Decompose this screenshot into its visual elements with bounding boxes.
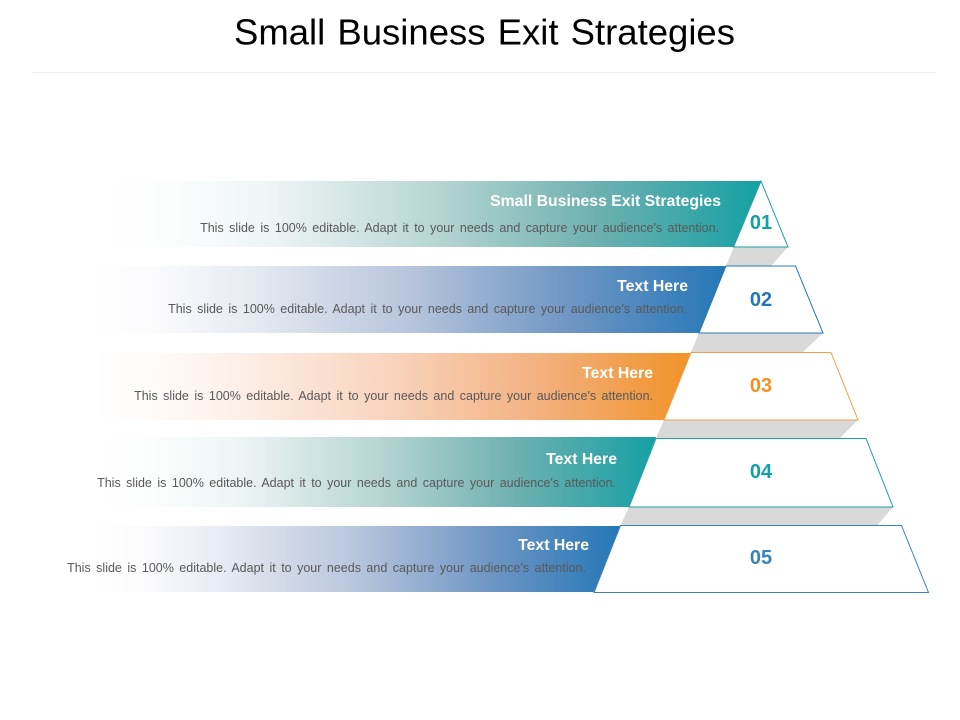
row 5 [67,526,928,592]
heading 1: Small Business Exit Strategies [490,193,721,210]
pyramid tier 04 [629,438,893,507]
row 4 [97,437,893,507]
description 5: This slide is 100% editable. Adapt it to your needs and capture your audience's attention. [67,561,586,575]
pyramid tier 02 [699,266,823,333]
number 02: 02 [750,289,772,311]
title: Small Business Exit Strategies [234,12,735,52]
row 2 [93,266,823,333]
pyramid connector shadows [620,247,893,526]
description 2: This slide is 100% editable. Adapt it to your needs and capture your audience's attention. [168,302,687,316]
number 05: 05 [750,547,772,569]
number 01: 01 [750,212,772,234]
description 4: This slide is 100% editable. Adapt it to your needs and capture your audience's attention. [97,476,616,490]
number 04: 04 [750,461,773,483]
banner 1 [105,181,761,247]
heading 4: Text Here [546,451,617,468]
row 1 [105,181,788,247]
pyramid tier 05 [594,526,928,592]
banner 5 [93,526,621,592]
heading 5: Text Here [518,537,589,554]
heading 2: Text Here [617,278,688,295]
banner 3 [95,353,691,420]
pyramid tier 01 [734,181,788,247]
description 1: This slide is 100% editable. Adapt it to your needs and capture your audience's attention. [200,221,719,235]
number 03: 03 [750,375,772,397]
banner 4 [97,437,656,507]
banner 2 [93,266,726,333]
description 3: This slide is 100% editable. Adapt it to your needs and capture your audience's attention. [134,389,653,403]
row 3 [95,352,858,420]
pyramid tier 03 [664,352,858,420]
heading 3: Text Here [582,365,653,382]
